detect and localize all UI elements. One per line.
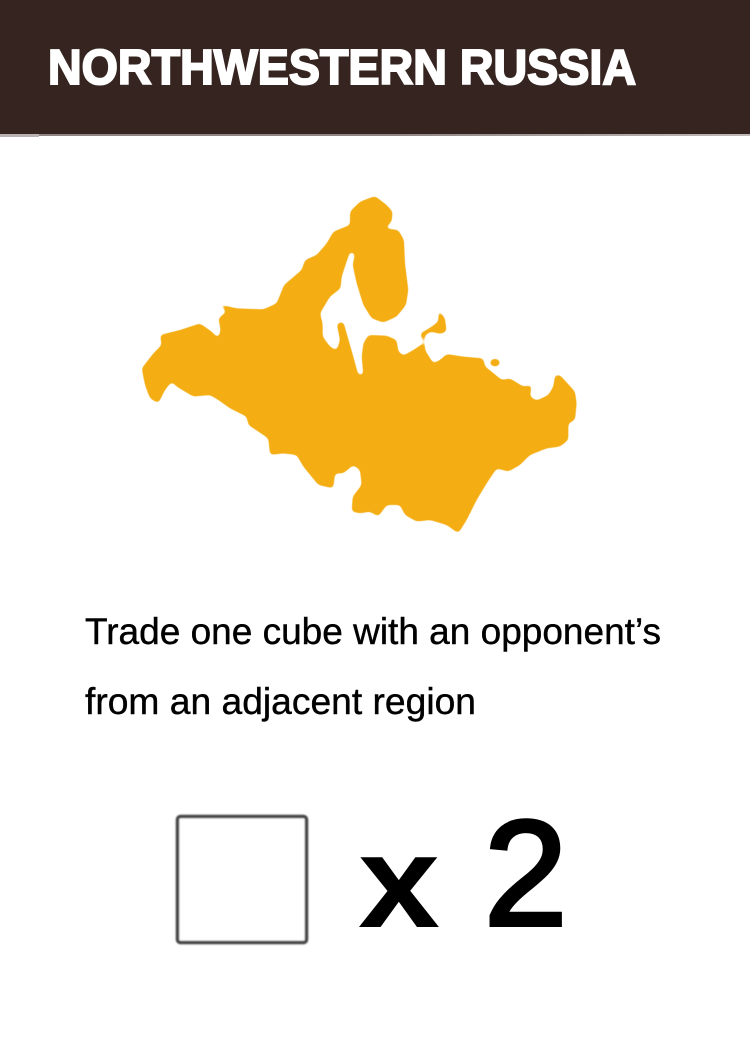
title: NORTHWESTERN RUSSIA xyxy=(48,41,636,95)
multiplier x 2: x xyxy=(358,808,440,955)
description text: from an adjacent region xyxy=(85,681,476,722)
description text: Trade one cube with an opponent’s xyxy=(85,611,661,652)
multiplier x 2 xyxy=(358,789,567,957)
map: Northwestern Russia region xyxy=(142,196,577,533)
description text xyxy=(85,611,661,722)
header banner xyxy=(0,0,750,137)
multiplier x 2: 2 xyxy=(484,789,567,957)
icon: empty cube square xyxy=(178,816,306,942)
